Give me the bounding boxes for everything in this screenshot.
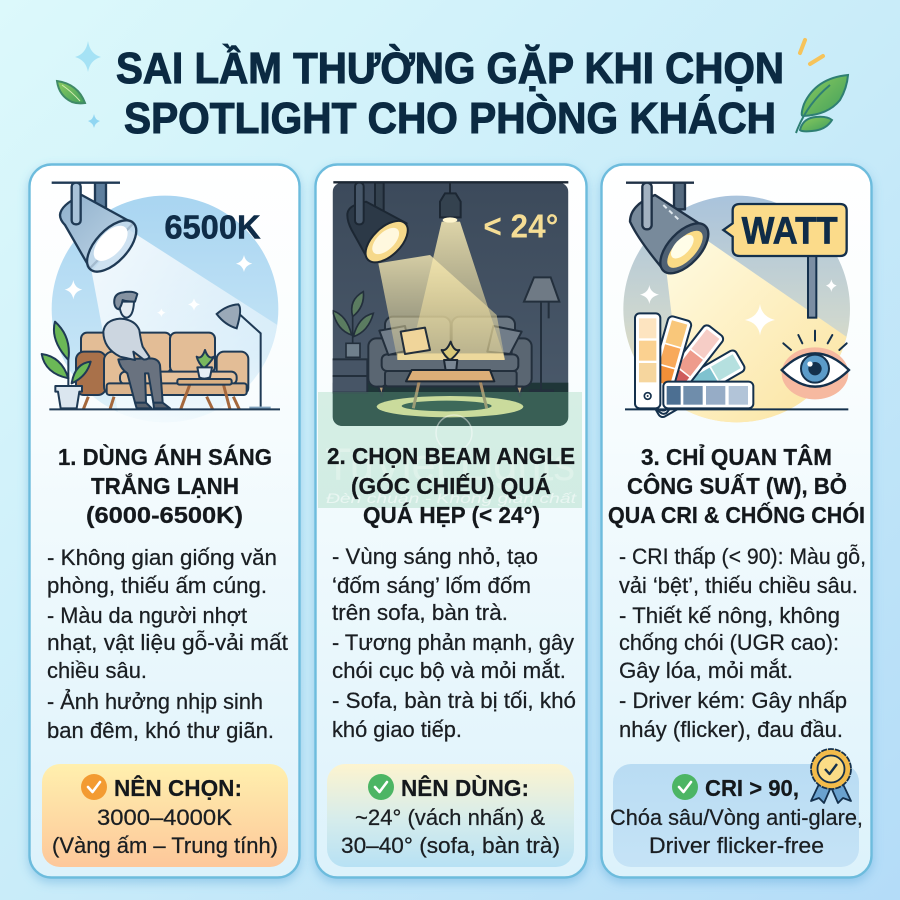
- text block 2: khó giao tiếp.: [332, 717, 462, 742]
- icon: eye: [782, 331, 849, 399]
- text block 2: - Sofa, bàn trà bị tối, khó: [332, 688, 576, 713]
- plant: [42, 322, 91, 408]
- heading 3: CÔNG SUẤT (W), BỎ: [627, 471, 847, 499]
- text block 2: chói cục bộ và mỏi mắt.: [332, 658, 566, 683]
- callout 3: CRI > 90,: [705, 775, 799, 801]
- icon: colour swatches fan: [635, 313, 753, 419]
- title: [116, 43, 784, 143]
- card 2 background: [316, 164, 586, 878]
- heading 1: (6000-6500K): [86, 502, 243, 528]
- heading 1: [58, 443, 272, 528]
- callout 3: [610, 749, 863, 867]
- heading 3: [608, 442, 865, 528]
- heading 2: QUÁ HẸP (< 24°): [363, 501, 540, 528]
- heading 3: QUA CRI & CHỐNG CHÓI: [608, 501, 865, 528]
- callout 2: 30–40° (sofa, bàn trà): [341, 833, 560, 858]
- callout 1: (Vàng ấm – Trung tính): [52, 833, 278, 858]
- callout 1: NÊN CHỌN:: [114, 774, 242, 801]
- sofa: [368, 317, 532, 396]
- illustration: man on sofa under cold light: [42, 183, 280, 427]
- plant: [333, 292, 373, 357]
- text block 1: chiều sâu.: [47, 658, 147, 683]
- heading 2: 2. CHỌN BEAM ANGLE: [327, 443, 575, 469]
- text block 2: - Tương phản mạnh, gây: [332, 630, 574, 655]
- text block 2: [332, 544, 576, 742]
- card 1 background: [30, 164, 300, 878]
- icon: floor lamp: [217, 304, 271, 408]
- icon: angled spotlight: [346, 184, 409, 264]
- label 6500K: 6500K: [164, 209, 261, 246]
- text block 3: - Driver kém: Gây nhấp: [619, 688, 847, 713]
- text block 3: Gây lóa, mỏi mắt.: [619, 658, 793, 683]
- text block 1: [47, 545, 288, 743]
- sofa: [76, 333, 248, 409]
- text block 1: - Không gian giống văn: [47, 545, 277, 570]
- icon: leaf top left: [57, 81, 85, 103]
- icon: yellow dashes: [800, 40, 823, 64]
- icon: spotlight: [626, 183, 717, 282]
- text block 2: trên sofa, bàn trà.: [332, 600, 508, 625]
- callout 3: Driver flicker-free: [649, 833, 824, 858]
- coffee table with plant: [406, 342, 494, 408]
- icon: green check: [672, 774, 698, 800]
- text block 1: phòng, thiếu ấm cúng.: [47, 573, 267, 598]
- text block 3: nháy (flicker), đau đầu.: [619, 717, 843, 742]
- icon: leaves top right: [796, 75, 848, 133]
- callout 3: Chóa sâu/Vòng anti-glare,: [610, 805, 863, 830]
- floor line: [49, 406, 280, 412]
- panel: mistake 2 narrow beam angle: [316, 164, 586, 878]
- illustration: watt sign, swatches and eye: [623, 183, 858, 427]
- callout 2: [327, 764, 574, 867]
- heading 1: 1. DÙNG ÁNH SÁNG: [58, 443, 272, 470]
- icon: orange check: [81, 774, 107, 800]
- text block 2: ‘đốm sáng’ lốm đốm: [332, 573, 531, 598]
- heading 2: (GÓC CHIẾU) QUÁ: [351, 472, 551, 499]
- title: SAI LẦM THƯỜNG GẶP KHI CHỌN: [116, 43, 784, 93]
- callout 1: 3000–4000K: [97, 805, 232, 830]
- text block 3: vải ‘bệt’, thiếu chiều sâu.: [619, 573, 858, 598]
- panel: mistake 3 watt only: [602, 164, 872, 878]
- watermark: [318, 392, 582, 508]
- text block 1: - Màu da người nhợt: [47, 603, 247, 628]
- watermark: TuViet Lights: [325, 439, 575, 490]
- sign WATT: WATT: [742, 209, 838, 252]
- cabinet: [330, 359, 367, 393]
- illustration: dark room with narrow beams: [330, 182, 568, 426]
- text block 1: - Ảnh hưởng nhịp sinh: [47, 689, 263, 714]
- lit pillow: [401, 328, 430, 354]
- watermark: Đèn chuẩn - Không gian chất: [326, 490, 578, 506]
- track bar: [333, 179, 568, 186]
- text block 3: chống chói (UGR cao):: [619, 630, 839, 655]
- text block 1: ban đêm, khó thư giãn.: [47, 718, 274, 743]
- callout 2: ~24° (vách nhấn) &: [355, 805, 545, 830]
- title: SPOTLIGHT CHO PHÒNG KHÁCH: [124, 93, 776, 143]
- heading 2: [327, 443, 575, 528]
- text block 3: - Thiết kế nông, không: [619, 603, 840, 628]
- floor line: [625, 406, 848, 412]
- text block 1: nhạt, vật liệu gỗ-vải mất: [47, 630, 288, 655]
- floor lamp: [524, 277, 559, 391]
- lit seat strip: [397, 353, 505, 360]
- person: [103, 292, 170, 408]
- callout 1: [42, 764, 288, 867]
- text block 2: - Vùng sáng nhỏ, tạo: [332, 544, 538, 569]
- panel: mistake 1 cold white light: [30, 164, 300, 878]
- text block 3: - CRI thấp (< 90): Màu gỗ,: [619, 544, 866, 569]
- sign post: [808, 255, 816, 318]
- floor light ring: [377, 396, 523, 417]
- heading 3: 3. CHỈ QUAN TÂM: [641, 442, 832, 470]
- light beams: [378, 255, 505, 359]
- icon: medal: [811, 749, 851, 803]
- icon: green check: [368, 774, 394, 800]
- icon: spotlight: [52, 183, 145, 280]
- callout 2: NÊN DÙNG:: [401, 774, 529, 801]
- icon: pendant light: [440, 183, 461, 223]
- card 3 background: [602, 164, 872, 878]
- icon: small diamond sparkle: [88, 114, 100, 128]
- icon: sparkle top left: [75, 41, 101, 72]
- label less than 24 degrees: < 24°: [483, 209, 558, 246]
- coffee table with plant: [177, 350, 232, 409]
- heading 1: TRẮNG LẠNH: [91, 472, 239, 499]
- text block 3: [619, 544, 866, 742]
